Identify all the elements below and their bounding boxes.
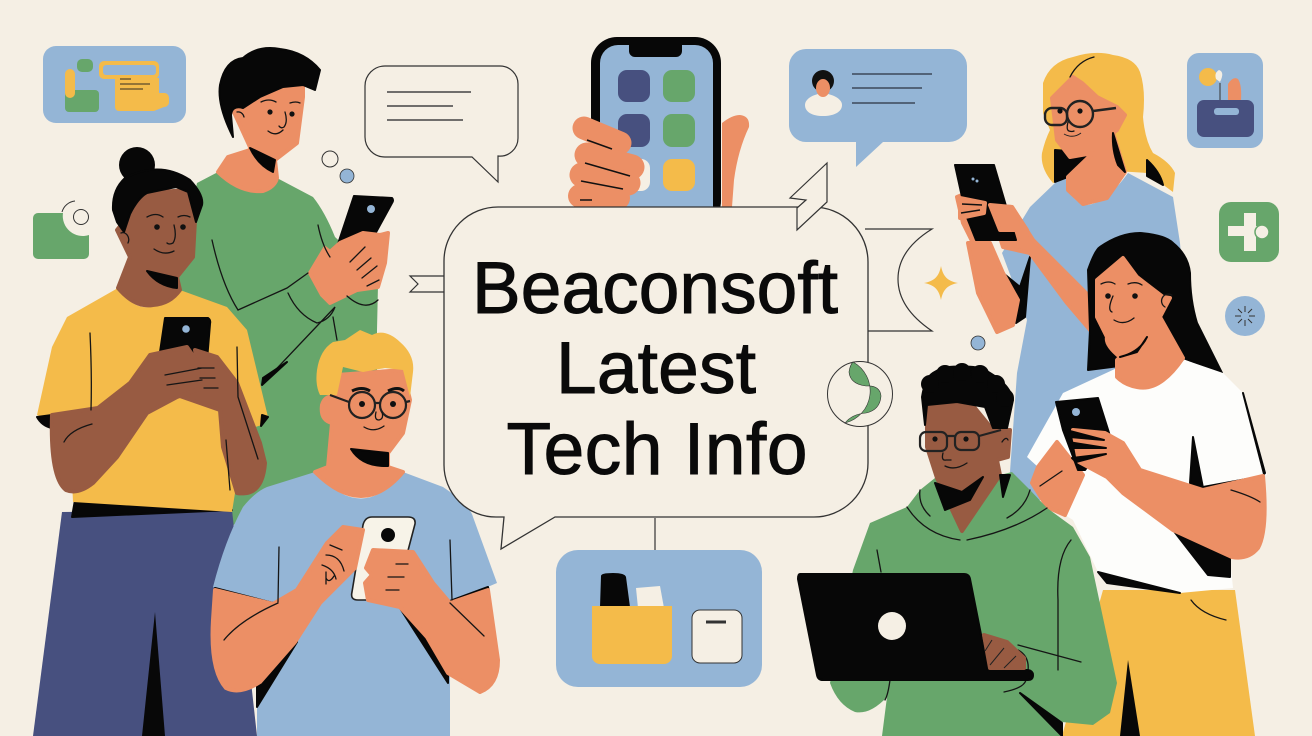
panel: bottom blue card: [556, 550, 762, 687]
title: Beaconsoft: [472, 248, 838, 329]
decorative connectors: [410, 163, 932, 550]
person: woman in yellow shirt: [33, 147, 268, 736]
icon: top-left blue card: [43, 46, 186, 123]
speech bubble: blue profile: [789, 49, 967, 167]
title speech bubble: [444, 207, 868, 549]
decorative circles: [322, 151, 354, 183]
small blue dot: [971, 336, 985, 350]
person: blond woman with glasses: [955, 53, 1185, 500]
icon: yellow sparkle: [924, 266, 958, 300]
speech bubble: outline top: [365, 66, 518, 182]
icon: left green shape: [33, 201, 89, 259]
icon: central phone held by hand: [580, 37, 749, 227]
title: Tech Info: [506, 409, 808, 490]
icon: right blue circle: [1225, 296, 1265, 336]
icon: top-right blue card: [1187, 53, 1263, 148]
icon: green swirl circle: [828, 362, 892, 426]
icon: right green plus tile: [1219, 202, 1279, 262]
title: Latest: [556, 328, 756, 409]
person: man in green hoodie with laptop: [798, 363, 1117, 736]
person: man in green sweater: [177, 48, 393, 525]
title: [472, 248, 838, 490]
person: blond man in blue shirt: [213, 330, 498, 736]
person: dark-haired woman in white shirt: [1027, 233, 1267, 736]
